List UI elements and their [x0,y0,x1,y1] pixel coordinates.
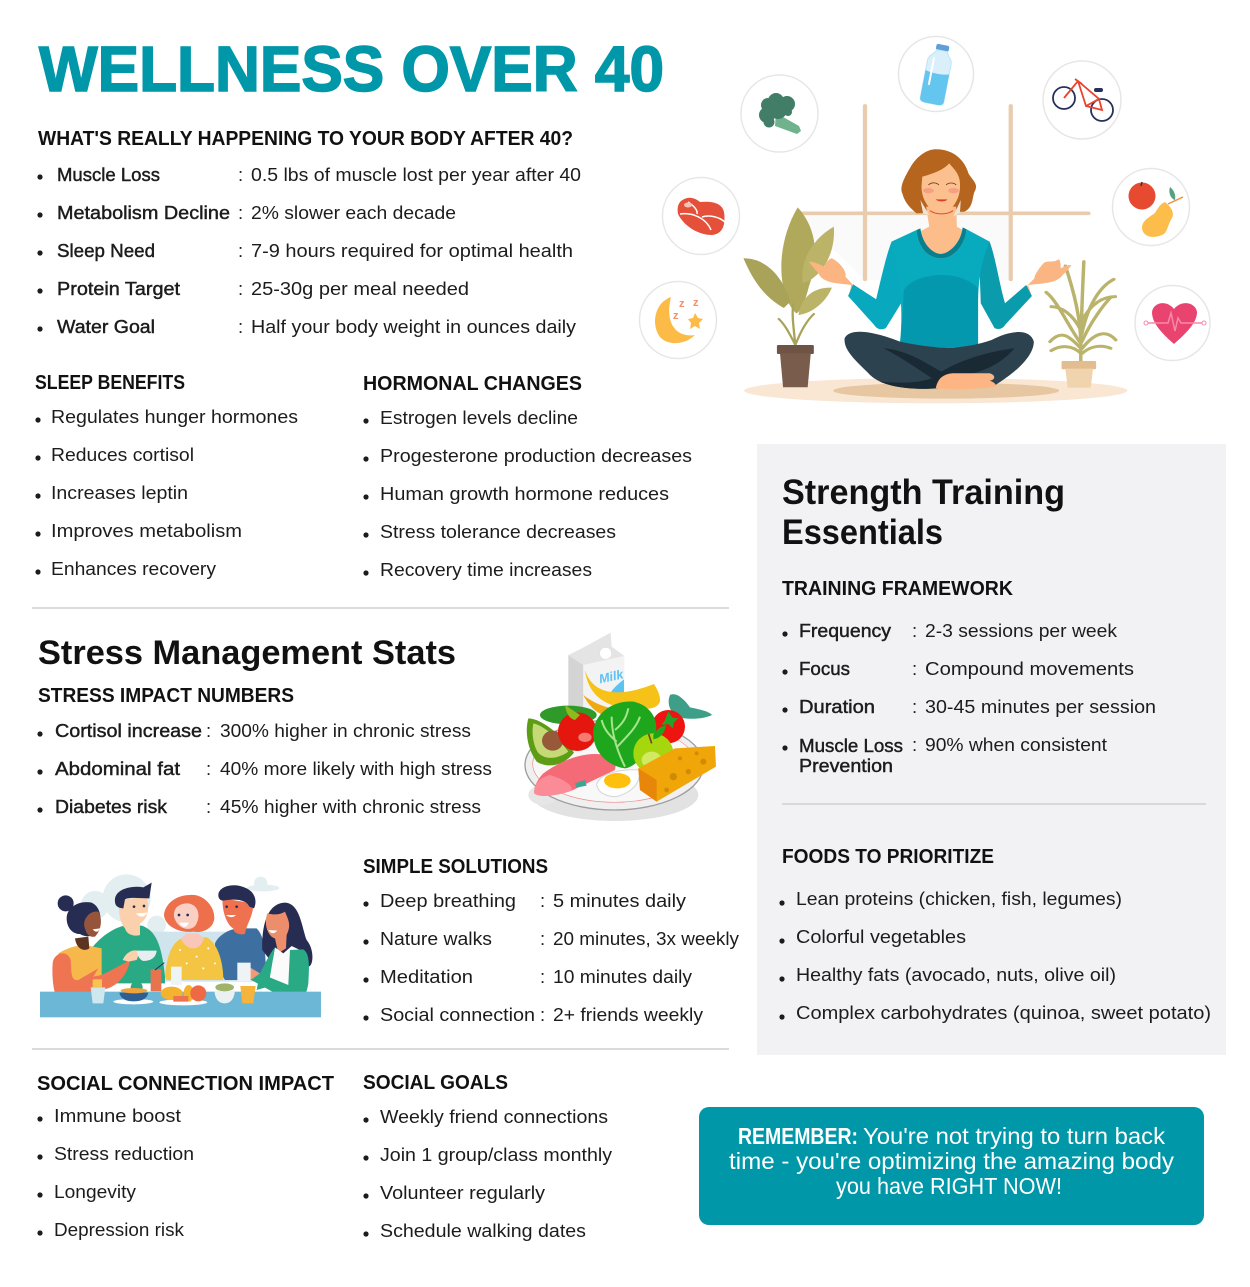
list: hormonal changes: Progesterone production decreases [380,445,692,466]
list: training framework: 30-45 minutes per session [925,696,1156,717]
list: social impact [37,1105,194,1240]
icon: moon and stars: z [693,297,699,309]
subheading: training framework: TRAINING FRAMEWORK [782,577,1013,600]
list: stress numbers [37,720,492,817]
callout: remember: time - you're optimizing the amazing body [729,1148,1175,1174]
list: body facts: Half your body weight in ounces daily [251,316,577,337]
illustration: healthy food plate [525,633,716,821]
heading: social goals: SOCIAL GOALS [363,1071,508,1094]
list: solutions: Nature walks [380,928,492,949]
list: sleep benefits: Increases leptin [51,482,188,503]
list: social impact: Longevity [54,1181,137,1202]
list: social impact: Stress reduction [54,1143,194,1164]
list: solutions: : [540,1004,545,1025]
list: social goals: Join 1 group/class monthly [380,1144,613,1165]
heading: hormonal changes: HORMONAL CHANGES [363,372,582,395]
list: body facts: 25-30g per meal needed [251,278,469,299]
panel: stress management stats [37,634,492,817]
list: stress numbers: Abdominal fat [55,758,180,779]
list: sleep benefits: Improves metabolism [51,520,242,541]
list: training framework: Focus [799,658,850,679]
list: hormonal changes: Recovery time increases [380,559,592,580]
list: training framework: Prevention [799,755,893,776]
panel: social connection impact [37,1072,334,1240]
list: solutions: Deep breathing [380,890,516,911]
person: woman on left [52,895,157,1003]
heading: simple solutions: SIMPLE SOLUTIONS [363,855,548,878]
list: solutions: Social connection [380,1004,535,1025]
list: body facts: : [238,164,243,185]
illustration: icon circles [640,36,1210,360]
callout: remember: REMEMBER: [738,1123,858,1149]
list: body facts: 0.5 lbs of muscle lost per year after 40 [251,164,581,185]
list: training framework: : [912,734,917,755]
list: body facts: Muscle Loss [57,164,160,185]
list: foods: Colorful vegetables [796,926,966,947]
face [922,163,960,213]
list: hormonal changes [363,407,692,580]
list: stress numbers: Cortisol increase [55,720,202,741]
panel: simple solutions [363,855,740,1025]
right plant [1046,262,1116,388]
heading: strength training essentials: Strength Training [782,473,1065,512]
icon: moon and stars [655,297,703,343]
icon: broccoli [759,93,801,134]
heading: social connection impact: SOCIAL CONNECTION IMPACT [37,1072,334,1095]
list: body facts [37,164,581,337]
callout: remember: You're not trying to turn back [863,1123,1166,1149]
list: training framework: 2-3 sessions per week [925,620,1118,641]
list: body facts: Protein Target [57,278,180,299]
right arm and hand [1026,259,1072,297]
list: solutions: Meditation [380,966,473,987]
callout: remember [699,1107,1204,1225]
feet [936,373,996,389]
list: solutions: : [540,966,545,987]
heading: strength training essentials: Essentials [782,513,943,552]
list: body facts: : [238,316,243,337]
panel: hormonal changes [363,372,692,580]
left arm and hand [809,258,853,297]
person: man in blue [215,885,266,980]
list: training framework: : [912,620,917,641]
list: body facts: Sleep Need [57,240,155,261]
list: social impact: Immune boost [54,1105,181,1126]
list: body facts: : [238,202,243,223]
icon: milk carton [568,633,626,713]
list: foods: Lean proteins (chicken, fish, legumes) [796,888,1122,909]
subheading: foods to prioritize: FOODS TO PRIORITIZE [782,845,994,868]
person: woman with red curls [164,895,223,980]
list: body facts: 2% slower each decade [251,202,456,223]
list: social impact: Depression risk [54,1219,185,1240]
list: social goals: Schedule walking dates [380,1220,586,1241]
torso [892,229,990,347]
panel: sleep benefits [35,371,298,579]
icon: steak [678,198,725,235]
list: stress numbers: : [206,796,211,817]
icon: moon and stars: z [679,298,685,310]
list: solutions: 2+ friends weekly [553,1004,704,1025]
icon: water bottle [919,42,954,106]
list: training framework: 90% when consistent [925,734,1107,755]
person: man in green [92,883,165,983]
list: stress numbers: Diabetes risk [55,796,168,817]
list: solutions [363,890,740,1025]
window frame [801,106,1088,280]
legs [845,332,1034,389]
heading: what's happening: WHAT'S REALLY HAPPENING TO YOUR BODY AFTER 40? [38,127,573,150]
list: training framework: : [912,696,917,717]
heading: sleep benefits: SLEEP BENEFITS [35,371,185,394]
list: solutions: : [540,890,545,911]
icon: milk carton: Milk [598,667,626,686]
floor [744,378,1127,403]
subheading: stress impact numbers: STRESS IMPACT NUMBERS [38,684,294,707]
list: body facts: Metabolism Decline [57,202,230,223]
list: stress numbers: 300% higher in chronic stress [220,720,471,741]
list: social goals: Weekly friend connections [380,1106,608,1127]
callout: remember: you have RIGHT NOW! [836,1173,1062,1199]
heading: strength training essentials [782,473,1065,552]
sleeves [848,242,904,329]
list: foods: Healthy fats (avocado, nuts, olive oil) [796,964,1116,985]
list: training framework: Compound movements [925,658,1134,679]
neck and chest [915,207,968,260]
list: training framework: Frequency [799,620,892,641]
list: social goals: Volunteer regularly [380,1182,546,1203]
list: training framework [782,620,1156,776]
list: solutions: 10 minutes daily [553,966,693,987]
list: social goals [363,1106,613,1241]
icon: moon and stars: z [673,310,679,322]
list: sleep benefits: Reduces cortisol [51,444,194,465]
list: training framework: : [912,658,917,679]
left plant [743,207,834,387]
woman [809,149,1072,389]
table and dishes [40,963,321,1017]
heading: stress management stats: Stress Management Stats [38,634,456,672]
list: stress numbers: : [206,758,211,779]
list: body facts: : [238,278,243,299]
icon: apple and pear [1128,182,1183,237]
person: woman on right [237,903,312,1003]
list: foods [779,888,1211,1023]
list: sleep benefits: Regulates hunger hormones [51,406,298,427]
list: foods: Complex carbohydrates (quinoa, sweet potato) [796,1002,1211,1023]
panel: strength training essentials [757,444,1226,1055]
list: sleep benefits: Enhances recovery [51,558,217,579]
list: sleep benefits [35,406,298,579]
list: solutions: 20 minutes, 3x weekly [553,928,740,949]
list: body facts: : [238,240,243,261]
icon: heart with pulse [1144,303,1206,344]
list: hormonal changes: Stress tolerance decreases [380,521,616,542]
section: body changes after 40 [37,127,581,337]
list: hormonal changes: Human growth hormone reduces [380,483,669,504]
list: stress numbers: : [206,720,211,741]
list: hormonal changes: Estrogen levels decline [380,407,578,428]
title: WELLNESS OVER 40 [39,33,664,105]
list: solutions: : [540,928,545,949]
panel: social goals [363,1071,613,1241]
hair [901,149,976,213]
list: body facts: 7-9 hours required for optimal health [251,240,573,261]
illustration: meditating woman and icons [743,106,1127,403]
illustration: friends sharing a meal [40,874,321,1017]
list: stress numbers: 45% higher with chronic stress [220,796,481,817]
list: training framework: Duration [799,696,875,717]
list: body facts: Water Goal [57,316,155,337]
list: training framework: Muscle Loss [799,735,903,756]
list: solutions: 5 minutes daily [553,890,687,911]
icon: bicycle [1053,79,1113,121]
list: stress numbers: 40% more likely with high stress [220,758,492,779]
